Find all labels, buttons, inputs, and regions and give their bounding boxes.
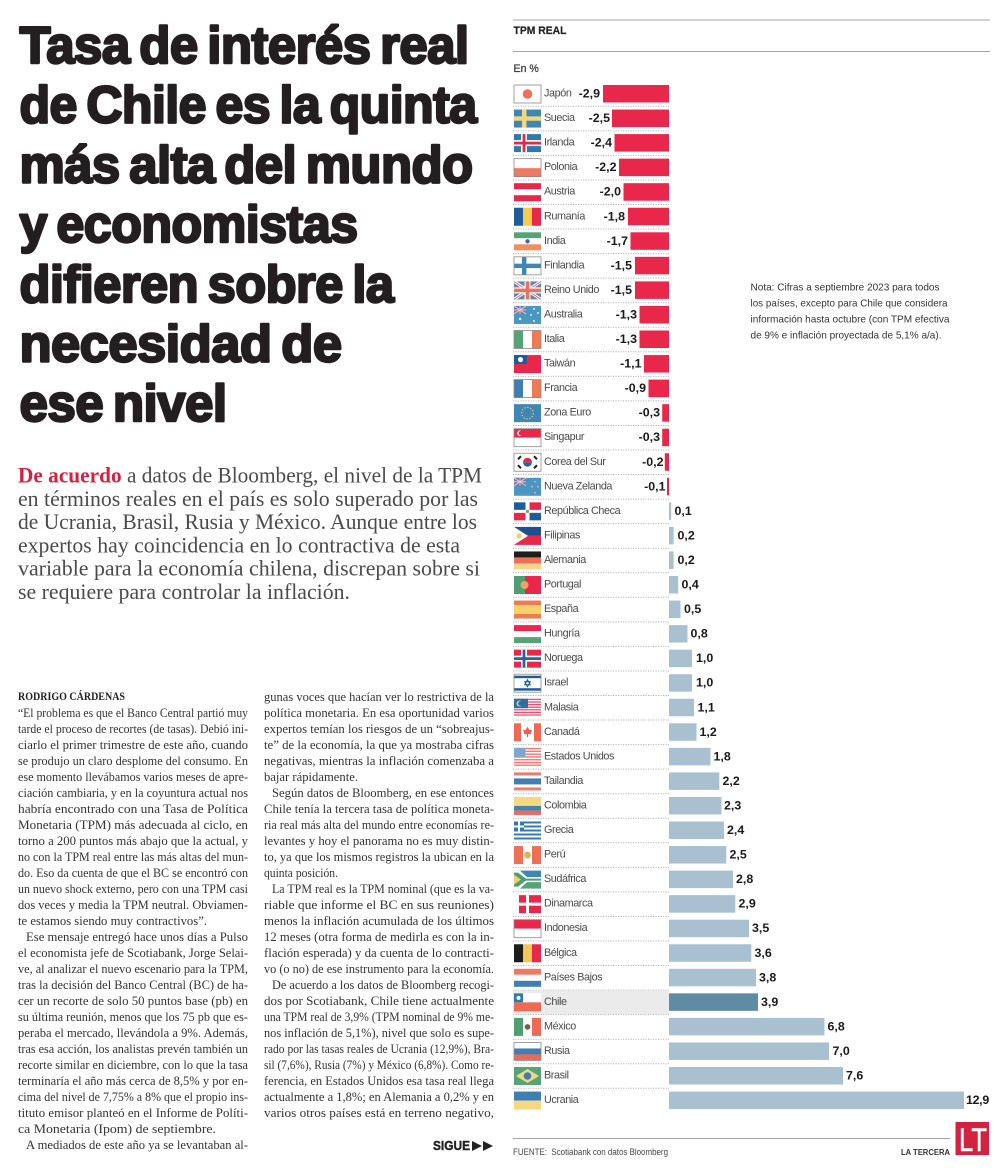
row: Dinamarca [513, 895, 756, 916]
row: Austria: Austria [544, 186, 575, 198]
chart header rules [513, 20, 990, 52]
row: Estados Unidos: 1,8 [714, 749, 731, 763]
article column 1: terminaría el año más cerca de 8,5% y por en- [18, 1073, 248, 1088]
article column 1: ciación cambiaria, y en la coyuntura actual nos [18, 785, 248, 800]
row: Rumanía: -1,8 [604, 209, 625, 223]
row: Colombia: Colombia [544, 799, 587, 811]
row: Filipinas: Filipinas [544, 529, 581, 541]
flag: India [514, 232, 541, 250]
flag: Japón [514, 85, 541, 103]
row: Rumanía: Rumanía [544, 210, 585, 222]
flag: España [514, 601, 541, 619]
article column 1: su última reunión, menos que los 75 pb que es- [18, 1009, 248, 1024]
row: Rumanía [513, 208, 669, 229]
flag: Indonesia [514, 920, 541, 938]
flag: Chile [514, 993, 541, 1011]
row: Corea del Sur: -0,2 [642, 455, 664, 469]
row: Rusia: 7,0 [832, 1044, 850, 1058]
article column 1: se produjo un claro desplome del consumo. En [18, 753, 248, 768]
row: Taiwán [513, 355, 669, 376]
row: Singapur: Singapur [544, 431, 585, 443]
title [20, 17, 478, 433]
flag: Polonia [514, 159, 541, 177]
row: Estados Unidos [513, 748, 731, 769]
article column 2: to, ya que los mismos registros la ubican en la [264, 849, 494, 864]
article column 1: te estamos siendo muy contractivos”. [18, 913, 207, 928]
row: Suecia: Suecia [544, 112, 575, 124]
row: Irlanda: -2,4 [591, 136, 612, 150]
flag: Ucrania [514, 1092, 541, 1110]
chart title: TPM REAL [514, 25, 567, 37]
row: Países Bajos [513, 969, 776, 990]
flag: Singapur [514, 429, 541, 447]
row: Sudáfrica: 2,8 [736, 872, 753, 886]
flag: Reino Unido [514, 281, 541, 299]
row: Noruega: 1,0 [696, 651, 713, 665]
row: Bélgica [513, 944, 772, 966]
row: Polonia: Polonia [544, 161, 578, 173]
row: Chile (highlighted): Chile [544, 996, 567, 1008]
article column 1: tarde el proceso de recortes (de tasas). Debió ini- [18, 721, 248, 736]
flag: Islandia [514, 134, 541, 152]
row: Rusia [513, 1042, 850, 1064]
row: Portugal: 0,4 [682, 578, 699, 592]
flag: Alemania [514, 551, 541, 569]
row: España: 0,5 [684, 602, 701, 616]
article column 1: A mediados de este año ya se levantaban al- [26, 1137, 248, 1152]
row: República Checa: 0,1 [674, 504, 692, 518]
flag: Países Bajos [514, 969, 541, 987]
article column 1: Ese mensaje entregó hace unos días a Pulso [26, 929, 248, 944]
row: Hungría: 0,8 [690, 627, 708, 641]
flag: Colombia [514, 797, 541, 815]
flag: Dinamarca [519, 895, 541, 913]
article column 1: Monetaria (TPM) más adecuada al ciclo, en [18, 817, 248, 832]
row: Grecia: Grecia [544, 824, 574, 836]
article column 2: Según datos de Bloomberg, en ese entonces [272, 785, 494, 800]
logo: LT: LT [959, 1122, 987, 1158]
flag: Italia [514, 330, 541, 348]
row: Noruega [513, 650, 713, 671]
article column 2: riable que informe el BC en sus reuniones) [264, 897, 494, 912]
row: Italia: -1,3 [616, 332, 637, 346]
article column 1: cer un recorte de solo 50 puntos base (pb) en [18, 993, 248, 1008]
row: Reino Unido [513, 281, 669, 303]
article column 2: te” de la economía, la que ya mostraba cifras [264, 737, 494, 752]
row: Hungría [513, 625, 708, 646]
flag: Francia [514, 380, 541, 398]
row: México: 6,8 [828, 1019, 845, 1033]
row: Perú [513, 846, 747, 867]
continuation marker: SIGUE [433, 1139, 493, 1153]
note: los países, excepto para Chile que considera [750, 298, 948, 310]
row: Israel: Israel [544, 677, 568, 689]
row: Suecia: -2,5 [589, 111, 610, 125]
article column 2: quinta posición. [264, 865, 338, 880]
article column 2: vo (o no) de ese instrumento para la economía. [264, 961, 494, 976]
row: Canadá [513, 723, 717, 745]
row: Polonia [513, 159, 669, 180]
row: Países Bajos: Países Bajos [544, 971, 603, 983]
row: Japón: Japón [544, 88, 572, 100]
row: Perú: 2,5 [730, 848, 747, 862]
article column 1: ciarlo el primer trimestre de este año, cuando [18, 737, 248, 752]
article column 2: La TPM real es la TPM nominal (que es la va- [272, 881, 494, 896]
row: Japón [513, 85, 669, 106]
row: Taiwán: -1,1 [620, 357, 642, 371]
row: Filipinas [513, 527, 695, 548]
deck paragraph: expertos hay coincidencia en lo contractiva de esta [18, 532, 460, 557]
article column 2: negativas, mientras la inflación comenzaba a [264, 753, 494, 768]
flag: Austria [514, 183, 541, 201]
flag: Israel [514, 674, 541, 692]
row: Israel: 1,0 [696, 676, 713, 690]
flag: Nueva Zelanda [514, 478, 541, 496]
article column 2: gunas voces que hacían ver lo restrictiva de la [264, 689, 494, 704]
row: España [513, 601, 701, 622]
flag: Zona Euro [514, 404, 541, 422]
row: Tailandia [513, 772, 740, 794]
byline: RODRIGO CÁRDENAS [18, 689, 125, 703]
flag: Perú [514, 846, 541, 864]
flag: Malasia [514, 699, 541, 717]
row: Francia: -0,9 [625, 381, 646, 395]
article column 1 [18, 705, 248, 1152]
row: Colombia [513, 797, 741, 818]
row: Indonesia: 3,5 [752, 921, 769, 935]
article column 2: una TPM real de 3,9% (TPM nominal de 9% me- [264, 1009, 494, 1024]
row: Portugal [513, 576, 699, 597]
row: Singapur [513, 429, 669, 450]
row: Japón: -2,9 [579, 86, 600, 100]
title: más alta del mundo [20, 136, 472, 194]
row: Polonia: -2,2 [595, 160, 617, 174]
article column 1: dos veces y media la TPM neutral. Obviamen- [18, 897, 248, 912]
flag: México [514, 1018, 541, 1036]
row: Australia [513, 306, 669, 327]
row: México: México [544, 1020, 576, 1032]
flag: Rumanía [514, 208, 541, 226]
row: Zona Euro: -0,3 [639, 406, 660, 420]
article column 2 [264, 689, 494, 1120]
deck paragraph: se requiere para controlar la inflación. [18, 579, 350, 604]
row: Malasia: Malasia [544, 701, 579, 713]
article column 1: tituto emisor planteó en el Informe de Políti- [18, 1105, 248, 1120]
row: Noruega: Noruega [544, 652, 583, 664]
row: Zona Euro [513, 404, 669, 425]
deck paragraph: de Ucrania, Brasil, Rusia y México. Aunque entre los [18, 509, 477, 534]
row: Israel [513, 674, 713, 696]
flag: Taiwán [514, 355, 541, 373]
row: India: -1,7 [607, 234, 628, 248]
row: Nueva Zelanda: -0,1 [644, 479, 666, 493]
row: Colombia: 2,3 [724, 798, 741, 812]
row: Malasia: 1,1 [698, 700, 715, 714]
article column 1: peraba el mercado, llevándola a 9%. Además, [18, 1025, 248, 1040]
row: España: España [544, 603, 579, 615]
row: Sudáfrica [513, 871, 753, 892]
article column 2: política monetaria. En esa oportunidad varios [264, 705, 494, 720]
row: Nueva Zelanda: Nueva Zelanda [544, 480, 612, 492]
row: Portugal: Portugal [544, 578, 581, 590]
title: necesidad de [20, 316, 342, 374]
title: ese nivel [20, 375, 226, 433]
article column 2: De acuerdo a los datos de Bloomberg recogi- [272, 977, 494, 992]
row: República Checa [513, 502, 692, 524]
flag: Noruega [514, 650, 541, 668]
article column 1: torno a 200 puntos más abajo que la actual, y [18, 833, 248, 848]
row: Grecia: 2,4 [727, 823, 744, 837]
row: Finlandia: -1,5 [611, 258, 632, 272]
article column 1: “El problema es que el Banco Central partió muy [18, 705, 248, 720]
row: Australia: -1,3 [616, 307, 637, 321]
row: Finlandia: Finlandia [544, 259, 585, 271]
article column 1: tras la decisión del Banco Central (BC) de ha- [18, 977, 248, 992]
flag: Australia [514, 306, 541, 324]
row: Suecia [513, 110, 669, 131]
article column 2: rado por las tasas reales de Ucrania (12,9%), Bra- [264, 1041, 494, 1056]
article column 2: flación esperada) y da cuenta de lo contracti- [264, 945, 494, 960]
article column 2: nos inflación de 5,1%), nivel que solo es supe- [264, 1025, 494, 1040]
row: Países Bajos: 3,8 [759, 970, 776, 984]
row: Italia [513, 330, 669, 352]
note: Nota: Cifras a septiembre 2023 para todos [750, 282, 940, 294]
flag: Canadá [514, 723, 541, 741]
row: Chile (highlighted): 3,9 [761, 995, 778, 1009]
flag: Suecia [514, 110, 541, 128]
row: Sudáfrica: Sudáfrica [544, 873, 586, 885]
row: India: India [544, 235, 566, 247]
row: Corea del Sur [513, 453, 669, 475]
row: Brasil: Brasil [544, 1070, 569, 1082]
row: Francia: Francia [544, 382, 578, 394]
row: Dinamarca: Dinamarca [544, 898, 593, 910]
row: Brasil: 7,6 [846, 1068, 863, 1082]
row: Singapur: -0,3 [639, 430, 660, 444]
row: Australia: Australia [544, 308, 583, 320]
flag: República Dominicana [514, 502, 541, 520]
note [750, 282, 950, 342]
note: información hasta octubre (con TPM efectiva [750, 314, 950, 326]
article column 2: actualmente a 1,8%; en Alemania a 0,2% y en [264, 1089, 494, 1104]
row: Zona Euro: Zona Euro [544, 407, 591, 419]
article column 1: do. Eso da cuenta de que el BC se encontró con [18, 865, 248, 880]
row: Malasia [513, 699, 715, 720]
article column 1: tras esa acción, los analistas prevén también un [18, 1041, 248, 1056]
title: Tasa de interés real [20, 17, 468, 75]
row: Estados Unidos: Estados Unidos [544, 750, 615, 762]
article column 2: Chile tenía la tercera tasa de política moneta- [264, 801, 494, 816]
flag: Corea del Sur [514, 453, 541, 471]
title: y economistas [20, 196, 358, 254]
row: Grecia [513, 822, 744, 843]
flag: Rusia [514, 1042, 541, 1060]
article column 1: el economista jefe de Scotiabank, Jorge Selai- [18, 945, 248, 960]
credit: LA TERCERA [901, 1147, 950, 1157]
title: de Chile es la quinta [20, 76, 478, 134]
deck paragraph: en términos reales en el país es solo superado por las [18, 486, 478, 511]
flag: Finlandia [514, 257, 541, 275]
row: Irlanda: Irlanda [544, 137, 575, 149]
row: Brasil [513, 1067, 863, 1088]
row: Alemania: Alemania [544, 554, 586, 566]
row: Bélgica: 3,6 [754, 946, 772, 960]
flag: Bélgica [514, 944, 541, 962]
flag: Hungría [514, 625, 541, 643]
flag: Tailandia [514, 772, 541, 790]
row: Corea del Sur: Corea del Sur [544, 456, 606, 468]
row: Rusia: Rusia [544, 1045, 570, 1057]
row: Canadá: 1,2 [700, 725, 717, 739]
chart unit: En % [514, 63, 539, 75]
bar chart: TPM real by country [513, 85, 989, 1110]
source: FUENTE: Scotiabank con datos Bloomberg [513, 1146, 668, 1157]
row: Italia: Italia [544, 333, 565, 345]
row: Chile (highlighted) [513, 990, 778, 1015]
row: Austria [513, 183, 669, 204]
article column 2: ria real más alta del mundo entre economías re- [264, 817, 494, 832]
deck paragraph: De acuerdo a datos de Bloomberg, el nivel de la TPM [18, 463, 482, 488]
flag: Grecia [514, 822, 541, 840]
row: Ucrania: 12,9 [966, 1093, 989, 1107]
deck paragraph [18, 463, 482, 604]
article column 2: sil (7,6%), Rusia (7%) y México (6,8%). Como re- [264, 1057, 494, 1072]
article column 2: menos la inflación acumulada de los últimos [264, 913, 494, 928]
flag: Filipinas [514, 527, 541, 545]
row: Indonesia [513, 920, 769, 941]
article column 2: dos por Scotiabank, Chile tiene actualmente [264, 993, 494, 1008]
row: Alemania [513, 551, 695, 573]
row: Finlandia [513, 257, 669, 278]
article column 2: bajar rápidamente. [264, 769, 358, 784]
article column 1: un nuevo shock externo, pero con una TPM casi [18, 881, 248, 896]
title: difieren sobre la [20, 256, 395, 314]
flag: Estados Unidos [514, 748, 541, 766]
row: Dinamarca: 2,9 [738, 897, 756, 911]
row: Nueva Zelanda [513, 478, 669, 499]
article column 1: ve, al analizar el nuevo escenario para la TPM, [18, 961, 248, 976]
row: Irlanda [513, 134, 669, 155]
row: Alemania: 0,2 [678, 553, 695, 567]
article column 1: no con la TPM real entre las más altas del mun- [18, 849, 248, 864]
flag: Portugal [514, 576, 541, 594]
row: Bélgica: Bélgica [544, 947, 577, 959]
row: Reino Unido: -1,5 [611, 283, 632, 297]
article column 1: cima del nivel de 7,75% a 8% que el propio ins- [18, 1089, 248, 1104]
article column 1: habría encontrado con una Tasa de Política [18, 801, 248, 816]
row: Tailandia: 2,2 [722, 774, 740, 788]
row: Hungría: Hungría [544, 628, 580, 640]
continuation marker: SIGUE: SIGUE [433, 1139, 470, 1153]
row: Perú: Perú [544, 849, 566, 861]
row: India [513, 232, 669, 254]
row: Reino Unido: Reino Unido [544, 284, 599, 296]
article column 2: ferencia, en Estados Unidos esa tasa real llega [264, 1073, 494, 1088]
article column 1: ca Monetaria (Ipom) de septiembre. [18, 1121, 216, 1136]
note: de 9% e inflación proyectada de 5,1% a/a). [750, 330, 942, 342]
row: Canadá: Canadá [544, 726, 580, 738]
deck paragraph: variable para la economía chilena, discrepan sobre si [18, 556, 480, 581]
flag: Brasil [514, 1067, 541, 1085]
row: México [513, 1018, 845, 1039]
article column 2: expertos temían los riesgos de un “sobreajus- [264, 721, 494, 736]
row: Ucrania: Ucrania [544, 1094, 579, 1106]
flag: Sudáfrica [514, 871, 541, 889]
row: Indonesia: Indonesia [544, 922, 588, 934]
article column 1: recorte similar en diciembre, con lo que la tasa [18, 1057, 248, 1072]
row: Francia [513, 380, 669, 401]
article column 1: ese momento llevábamos varios meses de apre- [18, 769, 248, 784]
row: Austria: -2,0 [600, 185, 621, 199]
footer rule [513, 1138, 950, 1140]
article column 2: levantes y hoy el panorama no es muy distin- [264, 833, 494, 848]
article column 2: varios otros países está en terreno negativo, [264, 1105, 494, 1120]
article column 2: 12 meses (otra forma de medirla es con la in- [264, 929, 494, 944]
row: República Checa: República Checa [544, 505, 621, 517]
row: Taiwán: Taiwán [544, 358, 576, 370]
row: Ucrania [514, 1092, 989, 1110]
row: Tailandia: Tailandia [544, 775, 583, 787]
row: Filipinas: 0,2 [678, 528, 695, 542]
